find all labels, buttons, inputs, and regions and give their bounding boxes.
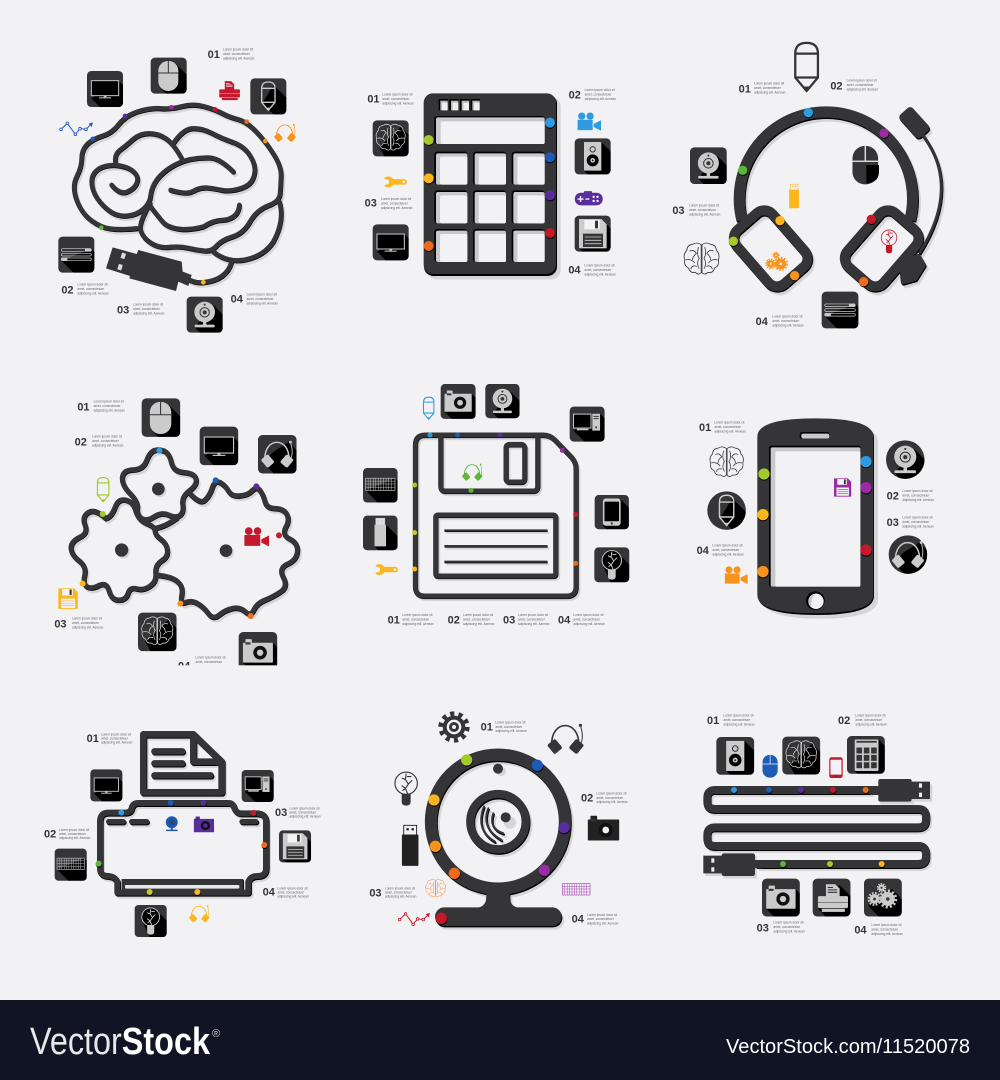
- label 04: amet, consectetuer: [772, 319, 799, 323]
- label 04: adipiscing elit. Aenean: [247, 301, 278, 305]
- timeline dots: [96, 800, 267, 895]
- label 01: amet, consectetuer: [94, 404, 121, 408]
- usb plug left: [703, 853, 763, 879]
- label 03: adipiscing elit. Aenean: [133, 312, 165, 316]
- panel: calculator: [365, 88, 616, 279]
- label 03: amet, consectetuer: [689, 208, 716, 212]
- icon: brain: [138, 613, 177, 651]
- label 04: [568, 264, 616, 277]
- timeline dots: [412, 432, 578, 571]
- label 03: [275, 807, 321, 819]
- icon: webcam: [690, 147, 727, 184]
- footer url: VectorStock.com/11520078: [726, 1036, 970, 1058]
- label 03: amet, consectetuer: [773, 925, 800, 929]
- label 04: amet, consectetuer: [712, 548, 739, 552]
- label 03: amet, consectetuer: [518, 617, 545, 621]
- label 04 (cropped): [178, 656, 226, 672]
- gear hubs: [115, 483, 234, 559]
- label 03: [503, 613, 550, 627]
- footer logo: ®: [212, 1028, 220, 1040]
- label 02: adipiscing elit. Aenean: [59, 836, 91, 840]
- icon: headset: [547, 724, 584, 754]
- phone speaker: [800, 432, 830, 439]
- icon: video camera: [578, 112, 601, 131]
- label 01: Lorem ipsum dolor sit: [402, 613, 433, 617]
- icon: keyboard: [562, 884, 590, 895]
- label 02: adipiscing elit. Aenean: [847, 88, 878, 92]
- headphones line drawing: [729, 105, 944, 295]
- label 03: adipiscing elit. Aenean: [381, 206, 413, 210]
- label 02: adipiscing elit. Aenean: [92, 443, 124, 447]
- icon: usb cable: [58, 237, 94, 273]
- label 01: [481, 721, 527, 734]
- label 04: 04: [756, 316, 769, 328]
- label 03: 03: [365, 198, 377, 210]
- label 04: amet, consectetuer: [573, 617, 600, 621]
- label 01: Lorem ipsum dolor sit: [714, 421, 745, 425]
- label 04: [263, 886, 309, 899]
- label 03: [887, 516, 934, 529]
- label 04: adipiscing elit. Aenean: [584, 273, 616, 277]
- label 01: 01: [367, 94, 380, 106]
- label 04: 04: [231, 294, 244, 306]
- label 01: Lorem ipsum dolor sit: [382, 92, 413, 96]
- icon: usb cable: [822, 292, 858, 328]
- icon: light bulb: [395, 772, 417, 806]
- cable line drawing: [707, 790, 928, 867]
- phone body: [757, 418, 878, 619]
- label 02: amet, consectetuer: [463, 617, 490, 621]
- label 04: [854, 923, 903, 936]
- label 02: Lorem ipsum dolor sit: [855, 713, 886, 717]
- label 03: [757, 921, 805, 935]
- icon: webcam: [485, 384, 520, 418]
- label 02: Lorem ipsum dolor sit: [77, 283, 108, 287]
- label 02: amet, consectetuer: [847, 83, 874, 87]
- webcam line drawing: [431, 755, 568, 920]
- label 01: [699, 421, 746, 434]
- icon: calculator: [847, 736, 885, 774]
- label 03: amet, consectetuer: [381, 201, 408, 205]
- label 02: 02: [830, 80, 843, 92]
- panel: usb cable: [703, 713, 932, 936]
- icon: wrench: [373, 564, 398, 575]
- label 04: 04: [854, 924, 867, 936]
- label 03: adipiscing elit. Aenean: [773, 930, 805, 934]
- icon: video camera: [725, 566, 748, 584]
- label 02: adipiscing elit. Aenean: [855, 722, 887, 726]
- label 04: [572, 913, 619, 926]
- label 04: 04: [558, 615, 571, 627]
- label 04: adipiscing elit. Aenean: [573, 622, 605, 626]
- label 04: [558, 613, 605, 627]
- label 01: amet, consectetuer: [714, 425, 741, 429]
- label 03: adipiscing elit. Aenean: [689, 213, 721, 217]
- printer line drawing: [100, 734, 268, 896]
- label 03: [54, 617, 104, 631]
- icon: floppy: [575, 216, 611, 252]
- label 04: amet, consectetuer: [584, 268, 611, 272]
- panel: webcam: [369, 714, 628, 926]
- icon: pencil: [250, 78, 286, 114]
- icon: gamepad: [575, 191, 603, 205]
- label 01: adipiscing elit. Aenean: [402, 622, 434, 626]
- label 04: [697, 544, 744, 557]
- label 03: adipiscing elit. Aenean: [902, 525, 934, 529]
- icon: phone: [595, 495, 629, 529]
- label 03: 03: [54, 619, 67, 631]
- label 03: [672, 204, 721, 217]
- icon: floppy: [834, 478, 851, 497]
- calculator buttons: [434, 152, 545, 262]
- timeline dots: [757, 456, 872, 577]
- label 01: [388, 613, 434, 627]
- icon: printer: [219, 81, 240, 100]
- usb plug right: [870, 779, 932, 804]
- gears line drawing: [71, 450, 299, 620]
- label 04: [756, 314, 804, 328]
- label 03: [369, 886, 417, 900]
- timeline dots: [428, 754, 570, 924]
- label 02: adipiscing elit. Aenean: [77, 292, 109, 296]
- label 02: adipiscing elit. Aenean: [902, 498, 934, 502]
- usb plug: [106, 247, 192, 291]
- icon: brain: [684, 243, 719, 274]
- label 01: Lorem ipsum dolor sit: [723, 713, 754, 717]
- icon: floppy: [279, 830, 311, 862]
- icon: brain: [373, 120, 409, 156]
- label 02: amet, consectetuer: [596, 796, 623, 800]
- label 01: 01: [699, 422, 711, 434]
- label 02: [448, 613, 495, 627]
- icon: graph: [60, 122, 93, 136]
- icon: headset: [258, 435, 297, 474]
- label 04: Lorem ipsum dolor sit: [277, 886, 308, 890]
- icon: pencil: [97, 477, 109, 502]
- label 02: amet, consectetuer: [902, 493, 929, 497]
- icon: monitor: [87, 71, 123, 107]
- phone screen: [769, 446, 860, 587]
- label 04 (cropped): Lorem ipsum dolor sit: [195, 656, 226, 660]
- label 03: Lorem ipsum dolor sit: [72, 617, 102, 621]
- label 04 (cropped): 04: [178, 660, 191, 672]
- label 02: adipiscing elit. Aenean: [596, 800, 628, 804]
- label 01: Lorem ipsum dolor sit: [754, 82, 784, 86]
- label 01: [739, 82, 786, 95]
- label 02: [61, 283, 109, 296]
- label 01: 01: [707, 715, 719, 727]
- icon: camera: [588, 816, 619, 840]
- label 01: adipiscing elit. Aenean: [382, 101, 414, 105]
- icon: computer: [242, 770, 274, 802]
- timeline dots: [729, 108, 889, 286]
- label 04: Lorem ipsum dolor sit: [871, 923, 902, 927]
- timeline dots: [731, 787, 885, 867]
- icon: pencil: [424, 397, 434, 419]
- icon: monitor: [373, 224, 409, 260]
- icon: computer: [570, 407, 605, 442]
- label 03: Lorem ipsum dolor sit: [689, 204, 719, 208]
- label 04: amet, consectetuer: [247, 297, 274, 301]
- panel: floppy disk: [363, 384, 629, 627]
- label 02: Lorem ipsum dolor sit: [585, 88, 615, 92]
- icon: brain: [782, 737, 820, 774]
- icon: pencil: [707, 491, 746, 530]
- icon: pencil: [795, 43, 818, 91]
- label 01: adipiscing elit. Aenean: [223, 56, 255, 60]
- label 02: Lorem ipsum dolor sit: [902, 489, 933, 493]
- icon: headset: [189, 905, 210, 923]
- panel: headphones: [672, 43, 944, 328]
- label 02: 02: [44, 829, 56, 841]
- icon: camera: [239, 632, 277, 671]
- brain line drawing: [74, 105, 283, 285]
- label 02: Lorem ipsum dolor sit: [596, 792, 627, 796]
- label 01: 01: [481, 722, 493, 734]
- label 04: Lorem ipsum dolor sit: [712, 544, 743, 548]
- label 04: amet, consectetuer: [871, 927, 898, 931]
- panel: smartphone: [697, 418, 934, 619]
- label 04: amet, consectetuer: [277, 890, 304, 894]
- label 03: 03: [503, 615, 515, 627]
- label 04: adipiscing elit. Aenean: [772, 323, 804, 327]
- icon: light bulb: [594, 547, 629, 582]
- label 04: 04: [697, 545, 710, 557]
- label 02: adipiscing elit. Aenean: [585, 97, 616, 101]
- label 03: Lorem ipsum dolor sit: [289, 807, 320, 811]
- label 02: adipiscing elit. Aenean: [463, 622, 495, 626]
- label 02: amet, consectetuer: [77, 287, 104, 291]
- floppy line drawing: [415, 435, 578, 599]
- label 01: Lorem ipsum dolor sit: [495, 721, 526, 725]
- label 02: 02: [448, 615, 460, 627]
- label 01: amet, consectetuer: [402, 617, 429, 621]
- label 03: 03: [117, 304, 129, 316]
- label 03: Lorem ipsum dolor sit: [773, 921, 804, 925]
- label 01: adipiscing elit. Aenean: [714, 430, 746, 434]
- label 04: 04: [572, 914, 585, 926]
- label 04: adipiscing elit. Aenean: [587, 921, 619, 925]
- label 03: 03: [757, 923, 769, 935]
- label 03: amet, consectetuer: [289, 811, 316, 815]
- label 01: Lorem ipsum dolor sit: [94, 399, 124, 403]
- calculator display keys: [439, 99, 480, 110]
- label 01: adipiscing elit. Aenean: [94, 408, 125, 412]
- label 03: Lorem ipsum dolor sit: [133, 303, 163, 307]
- label 01: amet, consectetuer: [223, 52, 250, 56]
- label 03: 03: [275, 807, 287, 819]
- label 01: amet, consectetuer: [754, 86, 781, 90]
- lens button and small dot: [493, 764, 516, 829]
- label 03: Lorem ipsum dolor sit: [385, 886, 415, 890]
- icon: usb stick: [363, 516, 398, 550]
- label 01: Lorem ipsum dolor sit: [223, 47, 253, 51]
- icon: phone: [829, 757, 843, 778]
- label 01: adipiscing elit. Aenean: [101, 740, 133, 744]
- label 04: adipiscing elit. Aenean: [277, 894, 309, 898]
- label 02: [581, 792, 628, 805]
- icon: headset: [889, 535, 927, 574]
- label 01: 01: [77, 402, 90, 414]
- label 04: amet, consectetuer: [587, 917, 614, 921]
- icon: headset: [274, 124, 296, 142]
- icon: mouse: [151, 58, 187, 94]
- label 01: 01: [208, 49, 220, 61]
- label 04: adipiscing elit. Aenean: [871, 932, 903, 936]
- label 02: amet, consectetuer: [855, 718, 882, 722]
- label 03: [117, 303, 165, 316]
- label 01: amet, consectetuer: [495, 725, 522, 729]
- label 03: Lorem ipsum dolor sit: [518, 613, 548, 617]
- label 04: adipiscing elit. Aenean: [712, 553, 744, 557]
- icon: usb stick: [789, 184, 799, 208]
- label 03: 03: [672, 205, 685, 217]
- label 03: 03: [887, 517, 899, 529]
- icon: gears: [864, 879, 902, 916]
- label 03: amet, consectetuer: [133, 307, 160, 311]
- timeline dots: [90, 105, 268, 285]
- icon: headset: [462, 464, 483, 481]
- icon: mouse: [762, 755, 778, 778]
- icon: webcam: [166, 816, 178, 831]
- label 03: [365, 197, 413, 210]
- icon: camera: [441, 384, 476, 419]
- panel: gears: [54, 398, 300, 685]
- icon: wrench: [382, 176, 407, 187]
- label 01: [707, 713, 755, 727]
- label 01: 01: [87, 733, 99, 745]
- label 04: 04: [263, 887, 276, 899]
- label 01: adipiscing elit. Aenean: [754, 91, 786, 95]
- timeline dots: [80, 448, 282, 619]
- label 02: 02: [887, 490, 899, 502]
- label 02: amet, consectetuer: [585, 92, 612, 96]
- label 02: [44, 828, 91, 841]
- label 01: amet, consectetuer: [723, 718, 750, 722]
- label 03: adipiscing elit. Aenean: [289, 815, 321, 819]
- label 02: [887, 489, 934, 502]
- label 03: amet, consectetuer: [385, 890, 412, 894]
- label 02: amet, consectetuer: [92, 439, 119, 443]
- icon: webcam: [187, 297, 223, 333]
- calculator body: [424, 93, 561, 279]
- label 02: [838, 713, 887, 727]
- label 01: [367, 92, 414, 106]
- icon: webcam: [886, 440, 925, 479]
- label 04 (cropped): amet, consectetuer: [195, 660, 222, 664]
- icon: speaker: [575, 138, 611, 174]
- label 03: adipiscing elit. Aenean: [518, 622, 550, 626]
- icon: mouse: [142, 398, 180, 437]
- icon: gear: [441, 714, 467, 740]
- icon: gears: [766, 252, 787, 270]
- label 03: Lorem ipsum dolor sit: [902, 516, 933, 520]
- icon: usb stick: [402, 825, 418, 866]
- label 02: Lorem ipsum dolor sit: [847, 79, 877, 83]
- label 03: amet, consectetuer: [902, 520, 929, 524]
- label 03: Lorem ipsum dolor sit: [381, 197, 411, 201]
- label 03: adipiscing elit. Aenean: [385, 895, 417, 899]
- timeline dots: [424, 118, 555, 251]
- label 01: [77, 399, 125, 414]
- footer bar: [0, 1000, 1000, 1080]
- label 04: 04: [568, 265, 581, 277]
- icon: monitor: [90, 769, 122, 801]
- label 02: 02: [581, 793, 593, 805]
- panel: printer: [44, 732, 321, 937]
- label 02: 02: [569, 89, 581, 101]
- icon: brain: [710, 447, 743, 477]
- icon: video camera: [244, 527, 269, 546]
- label 01: 01: [388, 615, 400, 627]
- icon: mouse: [852, 146, 879, 184]
- label 04: Lorem ipsum dolor sit: [772, 314, 803, 318]
- label 04: Lorem ipsum dolor sit: [584, 264, 615, 268]
- label 02: [569, 88, 616, 101]
- label 01: adipiscing elit. Aenean: [495, 729, 527, 733]
- label 02: 02: [75, 436, 87, 448]
- label 02: amet, consectetuer: [59, 832, 86, 836]
- icon: camera: [762, 879, 800, 916]
- label 02: Lorem ipsum dolor sit: [92, 434, 122, 438]
- icon: printer: [813, 879, 850, 916]
- label 03: amet, consectetuer: [72, 621, 99, 625]
- label 02: [75, 434, 124, 448]
- icon: keyboard: [363, 468, 398, 503]
- label 01: adipiscing elit. Aenean: [723, 722, 755, 726]
- label 04: [231, 292, 278, 306]
- label 01: amet, consectetuer: [101, 736, 128, 740]
- icon: light bulb: [135, 905, 167, 937]
- icon: keyboard: [55, 849, 87, 881]
- label 02: 02: [838, 715, 850, 727]
- icon: graph: [398, 913, 430, 926]
- icon: speaker: [716, 737, 754, 775]
- icon: floppy: [58, 588, 78, 609]
- label 01: amet, consectetuer: [382, 97, 409, 101]
- icon: brain: [426, 879, 445, 897]
- phone home button: [806, 591, 825, 610]
- label 03: 03: [369, 888, 382, 900]
- label 02: [830, 79, 878, 92]
- label 04: Lorem ipsum dolor sit: [247, 292, 277, 296]
- label 03: adipiscing elit. Aenean: [72, 626, 104, 630]
- panel: brain: [58, 47, 296, 333]
- label 02: 02: [61, 284, 74, 296]
- calculator screen: [434, 116, 545, 144]
- label 01: [208, 47, 255, 61]
- footer logo: VectorStock: [30, 1021, 211, 1063]
- icon: light bulb: [881, 230, 897, 253]
- label 01: 01: [739, 83, 751, 95]
- label 04: Lorem ipsum dolor sit: [587, 913, 617, 917]
- paper slot: [125, 885, 239, 889]
- label 01: Lorem ipsum dolor sit: [101, 732, 131, 736]
- label 01: [87, 732, 133, 745]
- icon: monitor: [200, 427, 238, 465]
- label 04: Lorem ipsum dolor sit: [573, 613, 604, 617]
- label 02: Lorem ipsum dolor sit: [59, 828, 89, 832]
- label 02: Lorem ipsum dolor sit: [463, 613, 493, 617]
- icon: camera: [194, 816, 214, 832]
